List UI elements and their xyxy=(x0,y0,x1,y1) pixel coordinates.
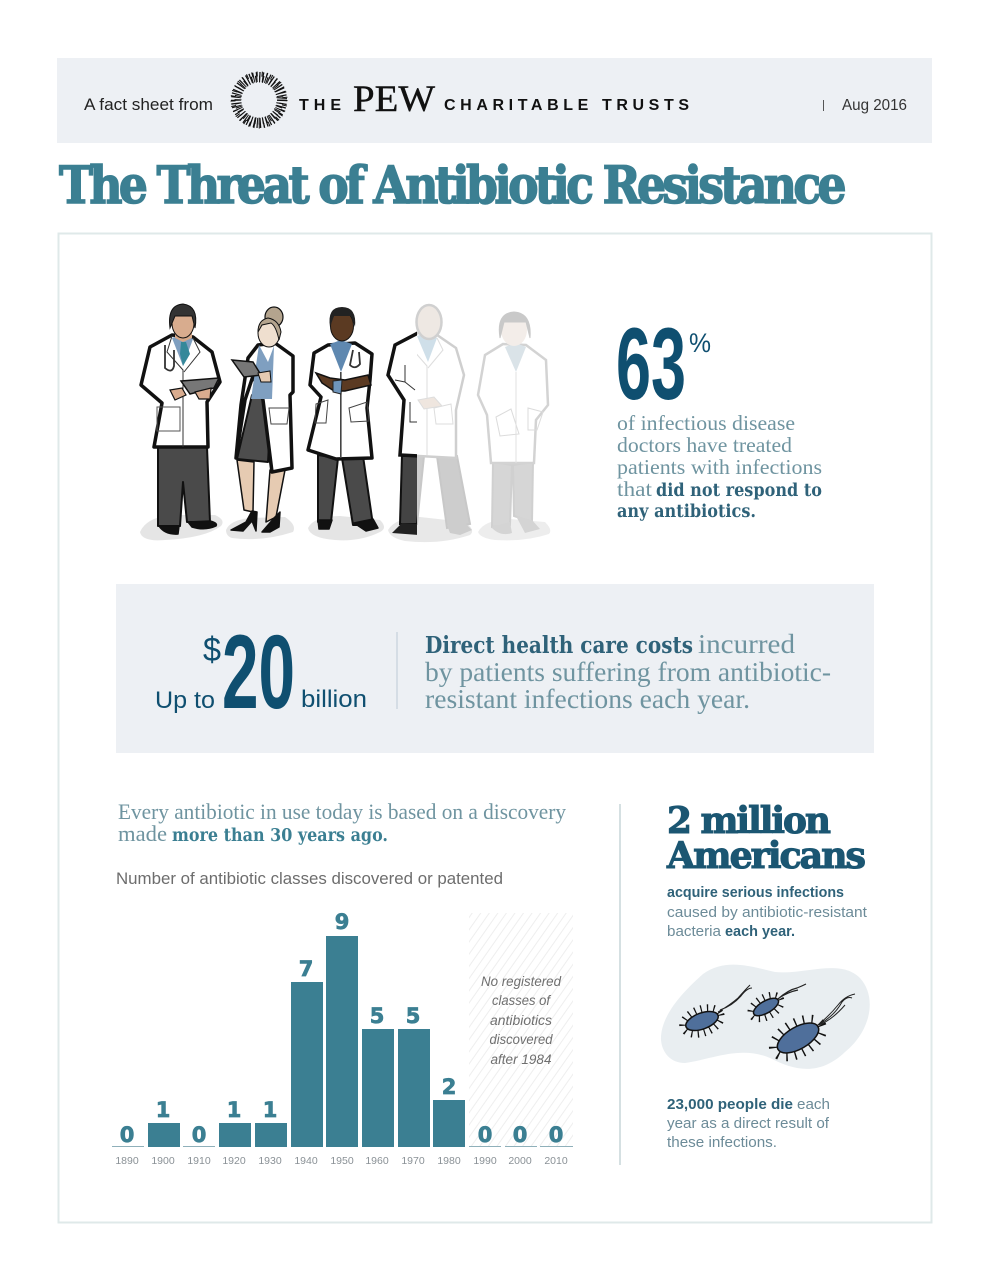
icon: bacteria illustration xyxy=(661,965,870,1069)
billion label: billion xyxy=(301,686,367,713)
year axis xyxy=(115,1155,568,1167)
value labels: 0 xyxy=(549,1123,563,1147)
year axis: 1940 xyxy=(294,1155,318,1167)
region note: discovered xyxy=(490,1032,553,1047)
value labels: 0 xyxy=(120,1123,134,1147)
doctor 4 (half faded) xyxy=(388,305,472,542)
zero baselines xyxy=(112,1146,573,1147)
deaths text: each xyxy=(797,1096,830,1113)
cost description: by patients suffering from antibiotic- xyxy=(425,657,831,687)
bacterium middle xyxy=(748,984,806,1023)
fact sheet label: A fact sheet from xyxy=(84,95,213,114)
value labels: 2 xyxy=(442,1075,456,1099)
cost description: incurred xyxy=(698,629,796,659)
stat description: doctors have treated xyxy=(617,433,792,457)
bacterium right xyxy=(768,994,855,1063)
description: acquire serious infections xyxy=(667,884,844,901)
description: caused by antibiotic-resistant xyxy=(667,904,868,921)
bars xyxy=(148,936,465,1147)
doctor 3 xyxy=(308,307,384,540)
stat description: did not respond to xyxy=(656,481,822,501)
year axis: 1980 xyxy=(437,1155,461,1167)
value labels xyxy=(120,910,563,1147)
value labels: 0 xyxy=(513,1123,527,1147)
bar chart: antibiotic classes by decade xyxy=(112,910,573,1167)
up to label: Up to xyxy=(155,687,215,714)
doctor 2 xyxy=(226,307,294,539)
value labels: 0 xyxy=(478,1123,492,1147)
bacterium left xyxy=(680,985,752,1038)
stat description: any antibiotics. xyxy=(617,502,756,522)
value labels: 7 xyxy=(299,957,313,981)
chart intro text: Every antibiotic in use today is based on a discovery xyxy=(118,799,566,824)
big number 63: 63 xyxy=(616,307,686,421)
logo wordmark: Charitable Trusts: CHARITABLE TRUSTS xyxy=(444,97,689,114)
region note: classes of xyxy=(492,993,551,1008)
main panel border xyxy=(58,234,932,1222)
stat: 63 percent xyxy=(616,307,822,522)
description: bacteria xyxy=(667,923,722,940)
description xyxy=(667,884,868,940)
big number 20: 20 xyxy=(222,614,295,731)
deaths text: these infections. xyxy=(667,1134,777,1151)
date: Aug 2016 xyxy=(842,97,907,114)
value labels: 1 xyxy=(263,1098,277,1122)
chart intro text: made xyxy=(118,821,167,846)
header band xyxy=(57,58,932,143)
value labels: 5 xyxy=(406,1004,420,1028)
percent sign: % xyxy=(689,328,711,358)
stat description: of infectious disease xyxy=(617,411,795,435)
doctor 1 xyxy=(140,304,223,540)
year axis: 2010 xyxy=(544,1155,568,1167)
title: The Threat of Antibiotic Resistance xyxy=(59,156,845,216)
heading xyxy=(666,800,865,877)
region note: after 1984 xyxy=(490,1052,552,1067)
value labels: 1 xyxy=(156,1098,170,1122)
value labels: 1 xyxy=(227,1098,241,1122)
year axis: 1950 xyxy=(330,1155,354,1167)
year axis: 1910 xyxy=(187,1155,211,1167)
shaded no-discovery region xyxy=(469,913,573,1146)
year axis: 1970 xyxy=(401,1155,425,1167)
chart intro text xyxy=(118,799,566,846)
stat description: that xyxy=(617,477,652,501)
heading: Americans xyxy=(666,835,865,877)
logo wordmark: THE: THE xyxy=(299,97,341,114)
heading: 2 million xyxy=(667,800,831,842)
region note: No registered xyxy=(481,974,561,989)
cost description: resistant infections each year. xyxy=(425,684,750,714)
year axis: 1920 xyxy=(222,1155,246,1167)
cost description: Direct health care costs xyxy=(425,632,693,659)
deaths text xyxy=(667,1096,830,1151)
stat description: patients with infections xyxy=(617,455,822,479)
year axis: 1900 xyxy=(151,1155,175,1167)
description: each year. xyxy=(725,923,795,940)
year axis: 1990 xyxy=(473,1155,497,1167)
chart title: Number of antibiotic classes discovered or patented xyxy=(116,869,503,888)
stat description xyxy=(617,411,822,522)
deaths text: year as a direct result of xyxy=(667,1115,830,1132)
value labels: 9 xyxy=(335,910,349,934)
stat: 2 million Americans xyxy=(661,800,870,1151)
region note xyxy=(481,974,561,1067)
year axis: 2000 xyxy=(508,1155,532,1167)
year axis: 1930 xyxy=(258,1155,282,1167)
chart intro text: more than 30 years ago. xyxy=(172,826,388,846)
icon: Pew sunburst logo xyxy=(233,74,285,126)
dollar sign: $ xyxy=(203,631,221,669)
year axis: 1890 xyxy=(115,1155,139,1167)
cost description xyxy=(425,629,831,714)
illustration: five doctors xyxy=(140,304,550,542)
doctor 5 (faded) xyxy=(478,312,550,540)
deaths text: 23,000 people die xyxy=(667,1096,793,1113)
value labels: 5 xyxy=(370,1004,384,1028)
value labels: 0 xyxy=(192,1123,206,1147)
panel: health care costs xyxy=(116,584,874,753)
year axis: 1960 xyxy=(365,1155,389,1167)
region note: antibiotics xyxy=(490,1013,552,1028)
logo wordmark: PEW: PEW xyxy=(353,79,435,120)
